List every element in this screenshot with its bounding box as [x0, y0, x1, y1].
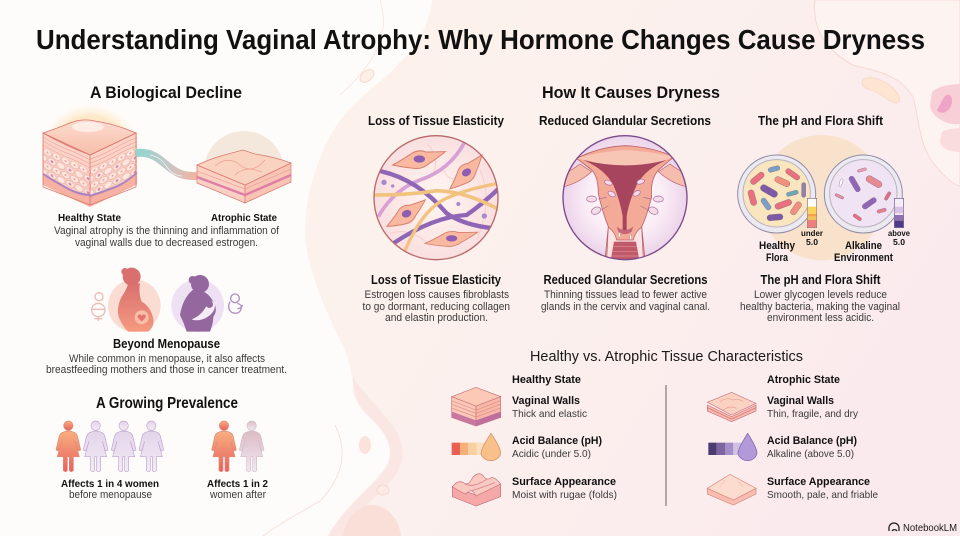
label: healthy flora: [759, 240, 796, 264]
label: healthy flora: Flora: [766, 252, 789, 264]
text block: ph and flora shift: healthy bacteria, making the vaginal: [740, 301, 900, 313]
illustration: uterus and glands circle: [560, 136, 690, 260]
text block: loss of tissue elasticity: Loss of Tissue Elasticity: [371, 273, 501, 287]
icon: thick tissue layers: [452, 387, 501, 426]
column: atrophic state: Atrophic State: [767, 374, 840, 386]
column: healthy state: Healthy State: [512, 374, 581, 386]
logo: notebooklm: NotebookLM: [903, 523, 957, 534]
column: atrophic state: Acid Balance (pH): [767, 435, 857, 447]
illustration: atrophic tissue block: [197, 131, 291, 203]
stat: 1 in 4: before menopause: [69, 489, 152, 501]
column: healthy state: Surface Appearance: [512, 476, 616, 488]
column: atrophic state: Thin, fragile, and dry: [767, 408, 859, 420]
subheading: loss of tissue elasticity: Loss of Tissue Elasticity: [368, 113, 505, 128]
divider: [665, 385, 667, 506]
column: healthy state: Acid Balance (pH): [512, 435, 602, 447]
text block: reduced glandular secretions: glands in the cervix and vaginal canal.: [541, 301, 710, 313]
icons: 1 in 2 women: [212, 421, 264, 472]
heading: a biological decline: A Biological Decline: [90, 83, 242, 102]
icons: healthy column: [452, 387, 501, 506]
text block: loss of tissue elasticity: to go dormant, reducing collagen: [362, 301, 510, 313]
heading: how it causes dryness: How It Causes Dryness: [542, 83, 720, 102]
heading: a growing prevalence: A Growing Prevalence: [96, 395, 238, 412]
label: alkaline environment: Environment: [834, 252, 893, 264]
petri dish: healthy flora: [738, 155, 816, 233]
subheading: reduced glandular secretions: Reduced Glandular Secretions: [539, 113, 711, 128]
icons: atrophic column: [707, 392, 757, 505]
column: atrophic state: Surface Appearance: [767, 476, 870, 488]
label: above 5.0: above: [888, 228, 910, 238]
icon: alkaline ph bar and drop: [708, 433, 757, 461]
text block: ph and flora shift: environment less acidic.: [767, 312, 874, 324]
illustration: petri dishes: [738, 135, 904, 260]
column: healthy state: Moist with rugae (folds): [512, 489, 617, 501]
icon: breastfeeding silhouette: [171, 275, 224, 332]
label: alkaline environment: [834, 240, 893, 264]
caption: healthy state: Healthy State: [58, 212, 121, 224]
ph strip: alkaline: [894, 198, 904, 228]
heading: comparison table: Healthy vs. Atrophic Tissue Characteristics: [530, 349, 803, 365]
illustration: connective tissue circle: [373, 136, 500, 260]
text block: ph and flora shift: [740, 273, 900, 324]
column: healthy state: Thick and elastic: [512, 408, 587, 420]
text block: ph and flora shift: The pH and Flora Shift: [760, 273, 881, 287]
column: atrophic state: [767, 374, 878, 501]
text: definition: Vaginal atrophy is the thinning and inflammation of: [54, 225, 280, 237]
icon: folded rugae surface: [452, 474, 501, 506]
stat: 1 in 4: Affects 1 in 4 women: [61, 478, 159, 490]
label: under 5.0: [801, 228, 824, 247]
column: healthy state: Vaginal Walls: [512, 395, 580, 407]
label: under 5.0: under: [801, 228, 824, 238]
text: beyond menopause: breastfeeding mothers and those in cancer treatment.: [46, 364, 287, 376]
stat: 1 in 2: women after: [209, 489, 266, 501]
label: above 5.0: 5.0: [893, 237, 905, 247]
text block: reduced glandular secretions: Thinning tissues lead to fewer active: [544, 289, 707, 301]
stat: 1 in 2: [207, 478, 268, 501]
stat: 1 in 2: Affects 1 in 2: [207, 478, 268, 490]
petri dish: alkaline: [824, 155, 902, 233]
text: beyond menopause: [46, 353, 287, 376]
label: healthy flora: Healthy: [759, 240, 796, 252]
text block: loss of tissue elasticity: Estrogen loss causes fibroblasts: [364, 289, 509, 301]
illustration: healthy tissue block: [38, 103, 142, 207]
icons: 1 in 4 women: [56, 421, 164, 472]
icon: pregnant silhouette: [108, 268, 161, 332]
subheading: ph and flora shift: The pH and Flora Shift: [758, 113, 884, 128]
text block: ph and flora shift: Lower glycogen levels reduce: [754, 289, 887, 301]
text: definition: [54, 225, 280, 249]
heading: beyond menopause: Beyond Menopause: [113, 337, 220, 351]
text block: reduced glandular secretions: [541, 273, 710, 313]
text: definition: vaginal walls due to decreased estrogen.: [75, 237, 258, 249]
icons: pregnant and breastfeeding figures: [92, 268, 243, 332]
column: atrophic state: Alkaline (above 5.0): [767, 448, 854, 460]
stat: 1 in 4: [61, 478, 159, 501]
caption: atrophic state: Atrophic State: [211, 212, 277, 224]
text block: loss of tissue elasticity: and elastin production.: [385, 312, 488, 324]
icon: thin tissue layers: [707, 392, 756, 422]
ph strip: healthy: [807, 198, 817, 228]
column: atrophic state: Vaginal Walls: [767, 395, 834, 407]
column: healthy state: [512, 374, 617, 501]
text block: reduced glandular secretions: Reduced Glandular Secretions: [544, 273, 708, 287]
arrow: healthy to atrophic: [136, 153, 197, 176]
text block: loss of tissue elasticity: [362, 273, 510, 324]
text: beyond menopause: While common in menopause, it also affects: [69, 353, 265, 365]
label: above 5.0: [888, 228, 910, 247]
icon: female symbol: [92, 293, 105, 321]
column: atrophic state: Smooth, pale, and friable: [767, 489, 878, 501]
icon: smooth pale surface: [707, 474, 756, 505]
icon: baby symbol: [229, 294, 243, 313]
icon: acidic ph bar and drop: [452, 433, 501, 461]
label: alkaline environment: Alkaline: [845, 240, 882, 252]
label: under 5.0: 5.0: [806, 237, 818, 247]
column: healthy state: Acidic (under 5.0): [512, 448, 591, 460]
backdrop circle: [759, 135, 884, 260]
